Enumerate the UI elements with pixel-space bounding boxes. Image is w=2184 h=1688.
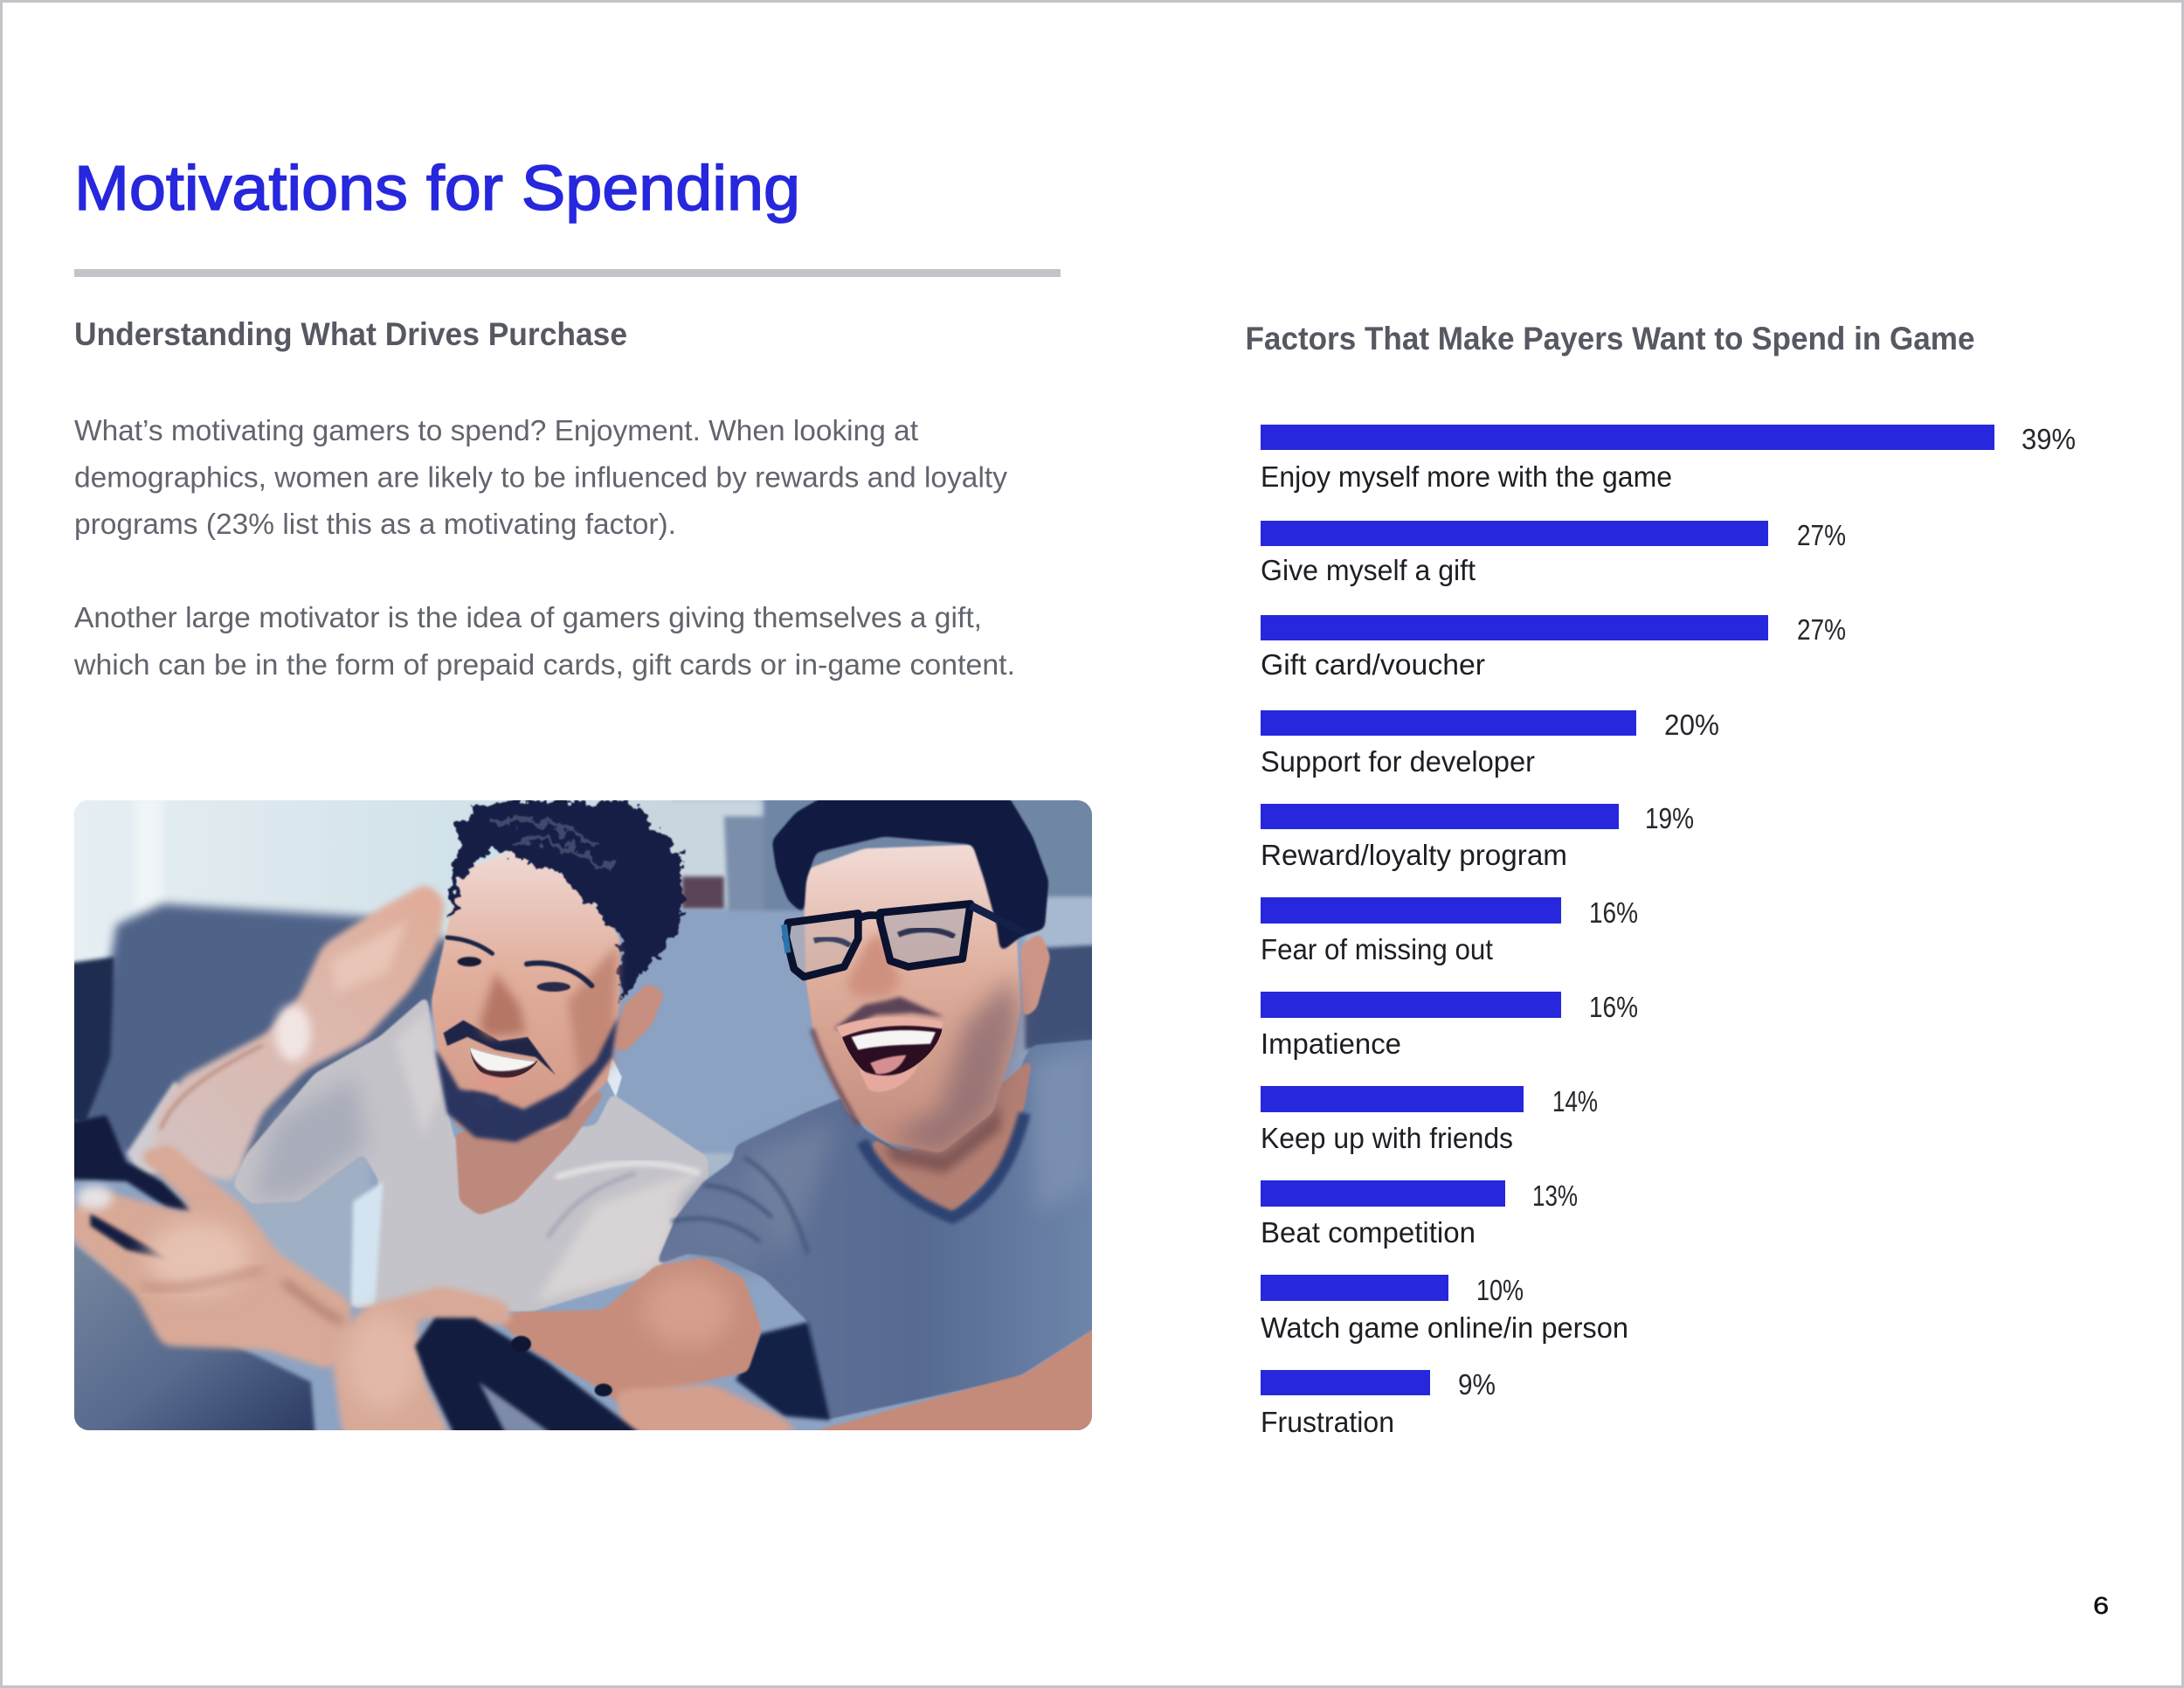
right man hair [772,796,1048,952]
wall and couch background [70,796,1102,1435]
bar chart [1261,423,2076,1438]
bar row: developer 20%: 20% [1664,709,1719,741]
title: Motivations for Spending [74,154,800,224]
bar row: competition 13%: Beat competition [1261,1216,1476,1249]
bar row: watch 10%: Watch game online/in person [1261,1311,1628,1344]
right man shirt [655,1039,1099,1420]
body text: which can be in the form of prepaid cards, gift cards or in-game content. [73,648,1015,681]
bar row: gift to self 27%: Give myself a gift [1261,554,1476,586]
body text [73,414,1015,681]
body text: Another large motivator is the idea of gamers giving themselves a gift, [74,601,982,633]
bar row: friends 14%: Keep up with friends [1261,1122,1513,1154]
right man neck [862,1057,1033,1218]
bar row: impatience 16%: Impatience [1261,1027,1401,1060]
bar row: developer 20% [1261,709,1719,778]
bar row: fomo 16% [1261,896,1638,965]
bar row: reward 19% [1261,802,1694,871]
bar row: gift to self 27% [1261,519,1846,586]
left man hair [449,800,684,1001]
left man face [432,850,620,1141]
right man face [804,845,1020,1153]
bar row: impatience 16% [1261,991,1638,1060]
bar row: frustration 9% [1261,1368,1496,1438]
bar row: reward 19%: Reward/loyalty program [1261,839,1567,871]
bar row: gift card 27%: 27% [1797,613,1846,646]
left man lower hand [70,1144,351,1370]
bar row: competition 13%: 13% [1532,1180,1578,1212]
left man shirt [127,995,708,1311]
bar row: gift card 27% [1261,613,1846,681]
bar row: enjoy 39% [1261,423,2076,493]
bar row: gift card 27%: Gift card/voucher [1261,648,1485,681]
left man facial features [435,937,618,1142]
photo: two men laughing while gaming [70,796,1102,1436]
page number: 6 [2093,1592,2109,1619]
bar row: reward 19%: 19% [1645,802,1694,834]
right man ear [1020,933,1051,1019]
right man stubble [812,977,1019,1153]
blurred game controller, right hand [415,1318,644,1436]
bar row: watch 10%: 10% [1476,1274,1524,1306]
left man raised forearm and hand [153,882,446,1181]
body text: demographics, women are likely to be influenced by rewards and loyalty [74,461,1007,493]
bar row: developer 20%: Support for developer [1261,745,1535,778]
bar row: fomo 16%: Fear of missing out [1261,933,1493,965]
bar row: friends 14% [1261,1085,1598,1154]
title rule [74,269,1061,277]
chart heading: Factors That Make Payers Want to Spend in Game [1246,321,1974,356]
bar row: competition 13% [1261,1180,1578,1249]
bar row: impatience 16%: 16% [1589,991,1638,1023]
left man neck [455,1090,608,1215]
bar row: enjoy 39%: Enjoy myself more with the game [1261,460,1672,493]
right man nose [847,933,901,997]
bar row: frustration 9%: 9% [1458,1368,1496,1401]
body text: What’s motivating gamers to spend? Enjoyment. When looking at [74,414,918,446]
bar row: friends 14%: 14% [1552,1085,1598,1117]
bar row: fomo 16%: 16% [1589,896,1638,929]
left man ear [612,983,665,1053]
blurred game controller, left hand [70,1115,195,1214]
right man glasses [784,903,1025,977]
right man mouth [834,997,944,1092]
right man hand on controller [330,1286,515,1436]
bar row: watch 10% [1261,1274,1628,1344]
right man outstretched arm [499,1257,1099,1436]
body text: programs (23% list this as a motivating factor). [74,508,676,540]
subheading: Understanding What Drives Purchase [74,316,627,352]
bar row: gift to self 27%: 27% [1797,519,1846,551]
bar row: enjoy 39%: 39% [2022,423,2076,455]
bar row: frustration 9%: Frustration [1261,1406,1394,1438]
